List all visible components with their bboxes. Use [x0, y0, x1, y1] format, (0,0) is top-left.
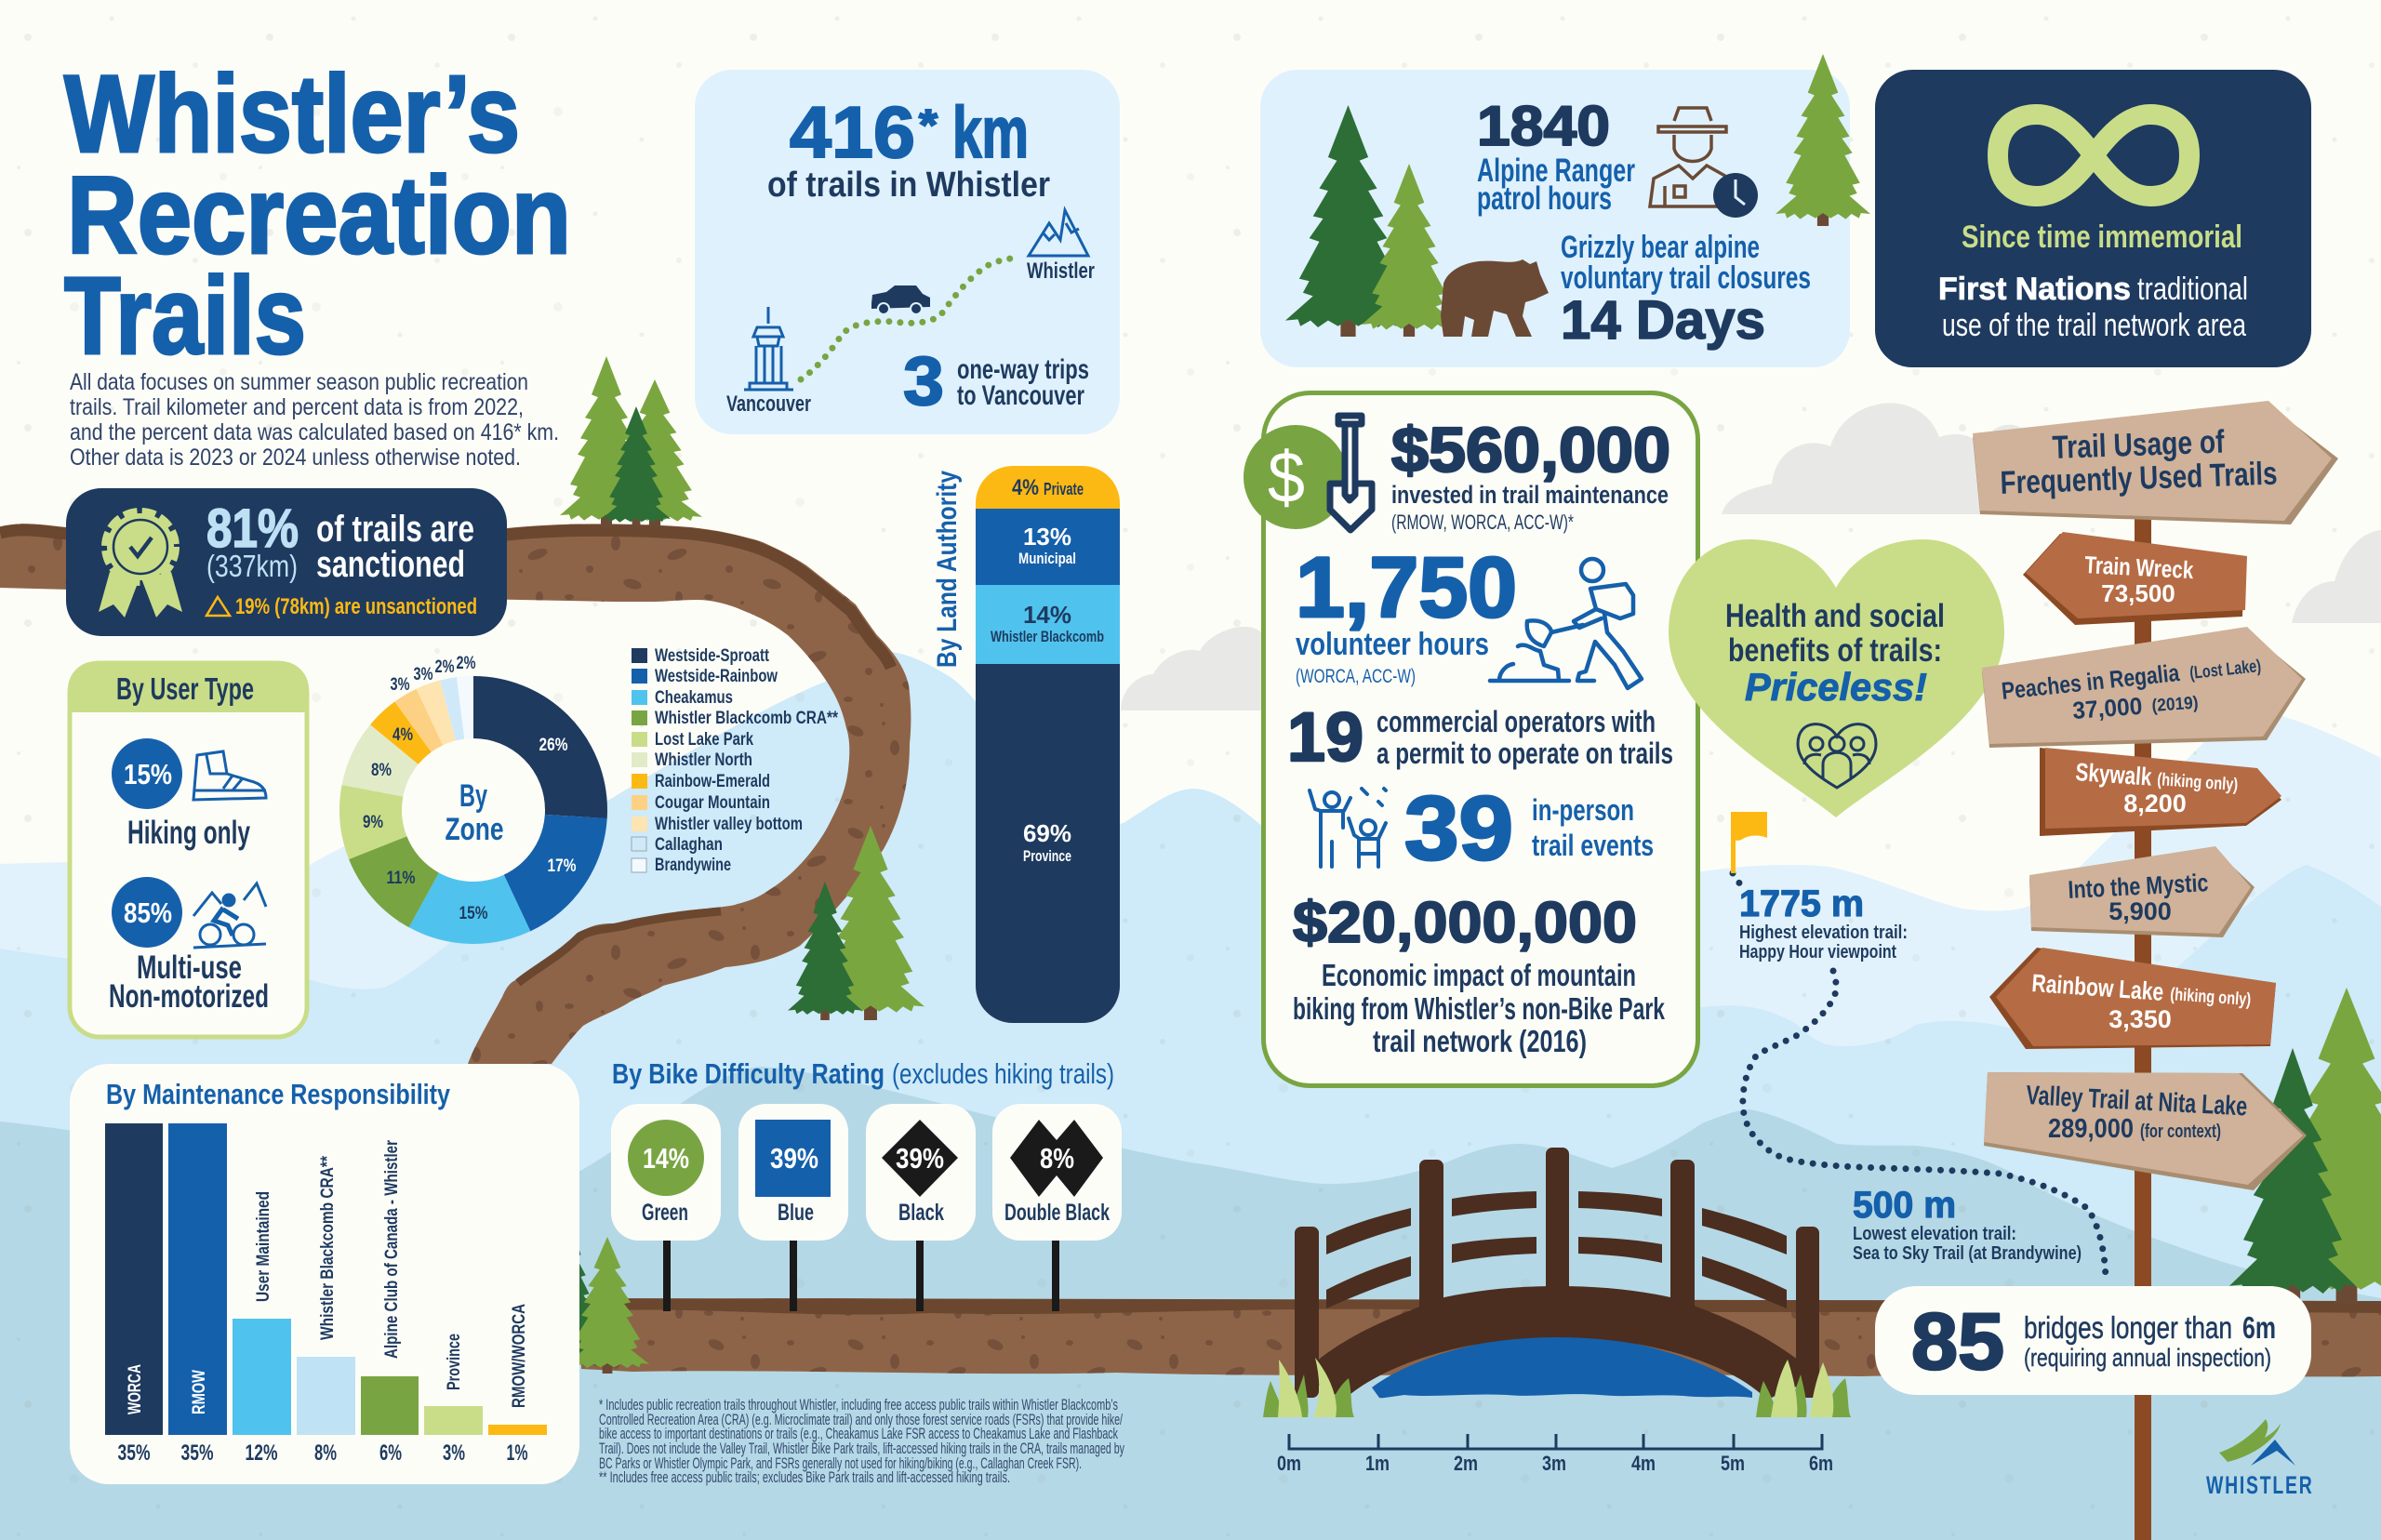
- label: hiking only: Hiking only: [127, 815, 250, 851]
- text: economic impact: Economic impact of mountain: [1322, 958, 1636, 992]
- sign: into the mystic: 5,900: [2108, 897, 2172, 925]
- text: health and social: Health and social: [1725, 598, 1945, 634]
- segment labels: 4%: [1012, 475, 1039, 500]
- value: 85%: 85%: [124, 896, 172, 929]
- text: one-way trips: [957, 354, 1089, 411]
- stat: 416 km: [790, 91, 1029, 173]
- panel: 416 km of trails: [695, 70, 1120, 434]
- scale ruler: 5m: [1721, 1452, 1745, 1475]
- label: multi-use: [109, 949, 269, 1015]
- panel: 81% sanctioned: [66, 488, 507, 636]
- sign: black 39%: Black: [898, 1200, 944, 1226]
- slice labels: 4%: [392, 725, 413, 745]
- sign: skywalk: Skywalk: [2075, 758, 2153, 791]
- footnote: BC Parks or Whistler Olympic Park, and FSRs generally not used for hiking/biking (e.g., Callaghan Creek FSR).: [599, 1454, 1082, 1472]
- sign: blue 39%: 39%: [770, 1142, 818, 1175]
- sign: trail usage header: [1973, 401, 2338, 524]
- text: lowest elevation: Sea to Sky Trail (at Brandywine): [1853, 1243, 2082, 1264]
- badge: 15%: [112, 738, 182, 809]
- stat: 560000: $560,000: [1391, 415, 1670, 485]
- upper winding trail: [0, 524, 911, 1064]
- segment labels: 13%: [1023, 523, 1071, 551]
- text: commercial operators: commercial operators with: [1377, 705, 1656, 738]
- sign: black 39%: [866, 1104, 976, 1241]
- bar labels: [126, 1140, 529, 1414]
- footnote: Controlled Recreation Area (CRA) (e.g. Microclimate trail) and only those forest service roads (FSRs) that provide hike/: [599, 1411, 1123, 1428]
- value: 15%: 15%: [124, 758, 172, 790]
- legend: zones: Westside-Sproatt: [655, 646, 770, 666]
- scale ruler: [1277, 1434, 1833, 1475]
- slice labels: 17%: [547, 856, 577, 876]
- sign: peaches in regalia: Peaches in Regalia: [2000, 658, 2181, 705]
- text: one-way trips: to Vancouver: [957, 380, 1084, 411]
- legend: zones: Callaghan: [655, 835, 723, 855]
- icon: mountain biker: [193, 883, 266, 948]
- sign: valley trail: 289,000: [2048, 1114, 2134, 1144]
- label: Whistler: Whistler: [1027, 259, 1095, 284]
- icon: car: [871, 285, 930, 314]
- dotted route: [801, 258, 1018, 379]
- sign: train wreck: 73,500: [2101, 579, 2175, 607]
- segment labels: 69%: [1023, 819, 1071, 847]
- trees: mid trail: [788, 826, 924, 1020]
- text: invested: invested in trail maintenance: [1391, 481, 1669, 509]
- footnote: Trail). Does not include the Valley Trail, Whistler Bike Park trails, lift-accessed hiking trails in the CRA, trails managed by: [599, 1440, 1124, 1457]
- heading: by bike difficulty rating: (excludes hiking trails): [892, 1057, 1114, 1090]
- trees: bottom-left trail: [535, 1220, 649, 1374]
- footnote: * Includes public recreation trails throughout Whistler, including free access public trails within Whistler Blackcomb’s: [599, 1396, 1118, 1414]
- text: economic impact: trail network (2016): [1373, 1024, 1587, 1058]
- icon: mountains: [1029, 210, 1088, 256]
- heading: By User Type: [116, 671, 254, 706]
- footnote: [599, 1396, 1124, 1486]
- sign: valley trail: [1984, 1072, 2307, 1190]
- text: first nations: First Nations: [1938, 272, 2131, 307]
- segment labels: Municipal: [1018, 550, 1076, 567]
- text: worca: (WORCA, ACC-W): [1296, 666, 1416, 687]
- sign: into the mystic: [2029, 846, 2255, 937]
- slice labels: 2%: [435, 657, 455, 677]
- intro text: Other data is 2023 or 2024 unless otherwise noted.: [70, 445, 521, 471]
- icon: warning: [206, 597, 230, 616]
- text: funders: (RMOW, WORCA, ACC-W)*: [1391, 511, 1574, 534]
- panel: first nations: [1875, 70, 2311, 367]
- icon: boot: [193, 751, 266, 800]
- intro text: and the percent data was calculated based on 416* km.: [70, 419, 559, 445]
- text: lowest elevation: 500 m: [1853, 1185, 1956, 1226]
- text: 337km: (337km): [206, 549, 298, 583]
- footnote: bike access to important destinations or trails (e.g., Cheakamus Lake FSR access to Cheakamus Lake and Flashback: [599, 1425, 1118, 1442]
- callout: heart priceless: [1669, 539, 2004, 817]
- bar labels: User Maintained: [254, 1191, 273, 1302]
- text: grizzly: [1561, 230, 1811, 296]
- panel: investment and impact: [1244, 392, 1698, 1086]
- intro text: trails. Trail kilometer and percent data is from 2022,: [70, 394, 524, 420]
- grass: right: [1756, 1360, 1851, 1417]
- text: of trails are sanctioned: sanctioned: [316, 544, 465, 585]
- text: health and social: [1725, 598, 1945, 669]
- trees: top of trail: [560, 356, 702, 527]
- text: lowest elevation: [1853, 1185, 2082, 1264]
- heading: By Maintenance Responsibility: [106, 1078, 451, 1110]
- icon: hiker with shovel: [1490, 559, 1642, 688]
- slice labels: 8%: [371, 761, 392, 780]
- sign: rainbow lake: [1989, 948, 2276, 1049]
- sign: green 14%: Green: [642, 1200, 688, 1226]
- segment labels: Province: [1023, 847, 1071, 865]
- bar labels: WORCA: [126, 1364, 145, 1414]
- stat: 416 km: km: [952, 91, 1029, 173]
- stat: 39: 39: [1404, 777, 1513, 879]
- stat: 3 trips: 3: [903, 342, 944, 419]
- bar labels: Province: [445, 1334, 464, 1390]
- slice labels: 9%: [363, 813, 383, 832]
- label: Vancouver: Vancouver: [726, 392, 811, 417]
- sign: green 14%: [611, 1104, 721, 1241]
- sign: peaches in regalia: 37,000: [2071, 692, 2143, 724]
- panel: 85 bridges: [1875, 1286, 2311, 1395]
- icon: dollar: [1244, 425, 1348, 529]
- text: bridges: bridges longer than: [2024, 1310, 2232, 1345]
- heading: by land authority: By Land Authority: [932, 471, 963, 668]
- elevation trail dotted line: [1733, 873, 2106, 1283]
- stat: 81%: 81%: [206, 498, 299, 559]
- sign: blue 39%: Blue: [778, 1200, 814, 1226]
- bottom trail: [581, 1298, 2381, 1376]
- sign: skywalk: [2040, 748, 2281, 836]
- text: volunteer hours: volunteer hours: [1296, 627, 1489, 662]
- legend: zones: Westside-Rainbow: [655, 667, 778, 686]
- sign: valley trail: (for context): [2140, 1122, 2221, 1142]
- text: first nations: use of the trail network area: [1942, 308, 2246, 343]
- label: multi-use: Non-motorized: [109, 978, 269, 1015]
- slice labels: [363, 654, 577, 923]
- icon: rosette: [99, 513, 182, 617]
- text: in-person: [1532, 793, 1654, 862]
- sign: into the mystic: Into the Mystic: [2068, 869, 2209, 904]
- icon: bear: [1441, 259, 1549, 337]
- slice labels: 15%: [459, 904, 488, 923]
- icon: Vancouver tower: [744, 307, 793, 390]
- chart: by zone donut: [328, 654, 619, 955]
- scale ruler: 1m: [1365, 1452, 1390, 1475]
- bar labels: RMOW/WORCA: [510, 1304, 529, 1408]
- legend: zones: Rainbow-Emerald: [655, 772, 770, 791]
- bridge: [1295, 1148, 1819, 1400]
- text: 6m: 6m: [2242, 1310, 2276, 1345]
- sign: green 14%: 14%: [643, 1142, 689, 1175]
- text: inspection: (requiring annual inspection): [2024, 1344, 2271, 1372]
- text: highest elevation: [1739, 883, 1908, 962]
- stat: 85: 85: [1911, 1297, 2004, 1387]
- text: highest elevation: Happy Hour viewpoint: [1739, 942, 1896, 962]
- chart: land authority stacked bar: [976, 466, 1120, 1023]
- segment labels: [991, 475, 1104, 865]
- segment labels: 14%: [1023, 601, 1071, 629]
- scale ruler: 6m: [1809, 1452, 1833, 1475]
- text: economic impact: biking from Whistler’s non-Bike Park: [1293, 991, 1665, 1026]
- icon: shovel: [1330, 416, 1372, 530]
- legend: zones: Brandywine: [655, 856, 731, 875]
- sign: double black 8%: 8%: [1040, 1142, 1074, 1175]
- text: first nations: traditional: [2137, 272, 2248, 307]
- bar labels: RMOW: [190, 1370, 209, 1414]
- text: grizzly: Grizzly bear alpine: [1561, 230, 1760, 265]
- stat: 1750: 1,750: [1296, 540, 1517, 635]
- stat: 20000000: $20,000,000: [1293, 891, 1637, 955]
- scale ruler: 3m: [1542, 1452, 1566, 1475]
- slice labels: 3%: [413, 665, 433, 684]
- slices: [328, 665, 619, 955]
- text: highest elevation: Highest elevation trail:: [1739, 923, 1908, 943]
- legend: zones: Whistler valley bottom: [655, 815, 803, 834]
- bar values: [117, 1440, 528, 1466]
- legend: zones: Cougar Mountain: [655, 793, 770, 813]
- subtitle: of trails in Whistler: [767, 166, 1050, 205]
- text: alpine ranger: [1477, 153, 1635, 217]
- legend: zones: [632, 646, 838, 875]
- trees: right side: [2229, 988, 2381, 1304]
- segment labels: Whistler Blackcomb: [991, 628, 1104, 645]
- slice labels: 26%: [539, 736, 568, 755]
- heading: by bike difficulty rating: [612, 1057, 1114, 1090]
- sign: train wreck: Train Wreck: [2084, 551, 2195, 584]
- stat: 19: 19: [1287, 698, 1363, 776]
- grass: left: [1263, 1358, 1354, 1417]
- icon: flag: [1731, 812, 1767, 873]
- center label: [445, 778, 504, 847]
- icon: clock: [1713, 173, 1758, 218]
- sign posts: difficulty: [663, 1237, 1059, 1311]
- title: Trails: [64, 255, 306, 378]
- text: commercial operators: a permit to operate on trails: [1377, 737, 1673, 770]
- text: in-person: in-person: [1532, 793, 1634, 827]
- stat: 416 km: *: [919, 100, 938, 149]
- sign: skywalk: 8,200: [2123, 790, 2187, 817]
- label: multi-use: Multi-use: [137, 949, 242, 986]
- sign: valley trail: Valley Trail at Nita Lake: [2026, 1081, 2248, 1122]
- text: lowest elevation: Lowest elevation trail:: [1853, 1224, 2016, 1244]
- bar labels: Whistler Blackcomb CRA**: [318, 1156, 338, 1340]
- intro text: All data focuses on summer season public recreation: [70, 369, 528, 395]
- bars: [105, 1123, 547, 1435]
- bar values: 1%: [506, 1440, 528, 1466]
- footnote: ** Includes free access public trails; excludes Bike Park trails and lift-accessed hiking trails.: [599, 1468, 1010, 1486]
- tree light: [1362, 164, 1457, 337]
- heading: by bike difficulty rating: By Bike Difficulty Rating: [612, 1057, 885, 1090]
- logo: whistler: [2206, 1419, 2312, 1499]
- sign: peaches in regalia: (Lost Lake): [2188, 657, 2262, 684]
- text: grizzly: voluntary trail closures: [1561, 260, 1811, 296]
- sign: peaches in regalia: [1982, 627, 2306, 748]
- sign: rainbow lake: (hiking only): [2170, 985, 2252, 1010]
- header band: [68, 661, 309, 712]
- sign: trail usage header: Trail Usage of: [2052, 424, 2225, 466]
- sign: trail usage header: Frequently Used Trails: [2000, 456, 2278, 501]
- slice labels: 2%: [456, 654, 476, 673]
- clouds: [1121, 403, 2381, 710]
- post: trail usage signpost: [2135, 514, 2151, 1540]
- text: in-person: trail events: [1532, 829, 1654, 862]
- intro text: [70, 369, 559, 471]
- sign: blue 39%: [738, 1104, 848, 1241]
- rails: [1326, 1191, 1787, 1308]
- posts: [1295, 1148, 1819, 1398]
- legend: zones: Whistler North: [655, 750, 752, 770]
- title: [64, 53, 571, 378]
- bar values: 35%: [180, 1440, 214, 1466]
- icon: heart people: [1798, 724, 1876, 788]
- text: highest elevation: 1775 m: [1739, 883, 1864, 924]
- segment labels: Private: [1044, 480, 1084, 498]
- sign: peaches in regalia: (2019): [2151, 694, 2199, 716]
- slice labels: 3%: [391, 675, 410, 695]
- tree right of panel: [1776, 54, 1870, 226]
- logo: whistler: WHISTLER: [2206, 1471, 2312, 1499]
- title: Recreation: [67, 154, 571, 277]
- scale ruler: 2m: [1454, 1452, 1478, 1475]
- text: alpine ranger: Alpine Ranger: [1477, 153, 1635, 189]
- text: health and social: benefits of trails:: [1728, 632, 1942, 669]
- text: one-way trips: one-way trips: [957, 354, 1089, 385]
- legend: zones: Lost Lake Park: [655, 730, 753, 750]
- bar values: 3%: [443, 1440, 465, 1466]
- stat: 14 days: 14 Days: [1561, 290, 1765, 351]
- bar labels: Alpine Club of Canada - Whistler: [382, 1140, 402, 1359]
- badge: 85%: [112, 877, 182, 948]
- center label: Zone: [445, 812, 504, 847]
- scale ruler: 0m: [1277, 1452, 1301, 1475]
- scale ruler: 4m: [1631, 1452, 1656, 1475]
- trees left: [1285, 105, 1411, 337]
- stat: 416 km: 416: [790, 91, 915, 173]
- icon: people celebrating: [1310, 789, 1386, 867]
- title: Whistler’s: [64, 53, 520, 176]
- text: economic impact: [1293, 958, 1665, 1058]
- icon: infinity: [1998, 114, 2189, 196]
- bar values: 6%: [379, 1440, 402, 1466]
- sign: black 39%: 39%: [896, 1142, 944, 1175]
- legend: zones: Whistler Blackcomb CRA**: [655, 709, 838, 728]
- sign: rainbow lake: Rainbow Lake: [2031, 969, 2164, 1006]
- text: alpine ranger: patrol hours: [1477, 180, 1612, 217]
- bar values: 35%: [117, 1440, 151, 1466]
- panel: by user type: [68, 661, 309, 1037]
- arch deck: [1302, 1286, 1819, 1400]
- panel: by maintenance responsibility: [70, 1064, 579, 1484]
- icon: dollar: $: [1268, 436, 1305, 518]
- text: since time immemorial: Since time immemorial: [1962, 219, 2242, 255]
- slice labels: 11%: [387, 869, 416, 888]
- sign: rainbow lake: 3,350: [2108, 1005, 2172, 1033]
- legend: zones: Cheakamus: [655, 688, 733, 708]
- sign: double black 8%: Double Black: [1004, 1200, 1110, 1226]
- sign: skywalk: (hiking only): [2157, 770, 2239, 795]
- icon: ranger: [1650, 108, 1730, 206]
- background mountains: [0, 651, 2381, 1540]
- stat: 1840: 1840: [1477, 95, 1610, 157]
- bar values: 8%: [314, 1440, 337, 1466]
- center label: By: [459, 778, 487, 814]
- panel: ranger and bear stats: [1260, 54, 1870, 367]
- water: [1372, 1335, 1752, 1398]
- text: first nations: [1938, 272, 2248, 343]
- sign: train wreck: [2023, 532, 2247, 625]
- sign: double black 8%: [992, 1104, 1122, 1241]
- bar values: 12%: [246, 1440, 277, 1466]
- text: priceless: Priceless!: [1745, 665, 1927, 709]
- text: of trails are sanctioned: of trails are: [316, 509, 474, 550]
- text: commercial operators: [1377, 705, 1673, 770]
- text: of trails are sanctioned: [316, 509, 474, 585]
- text: unsanctioned: 19% (78km) are unsanctioned: [235, 594, 477, 619]
